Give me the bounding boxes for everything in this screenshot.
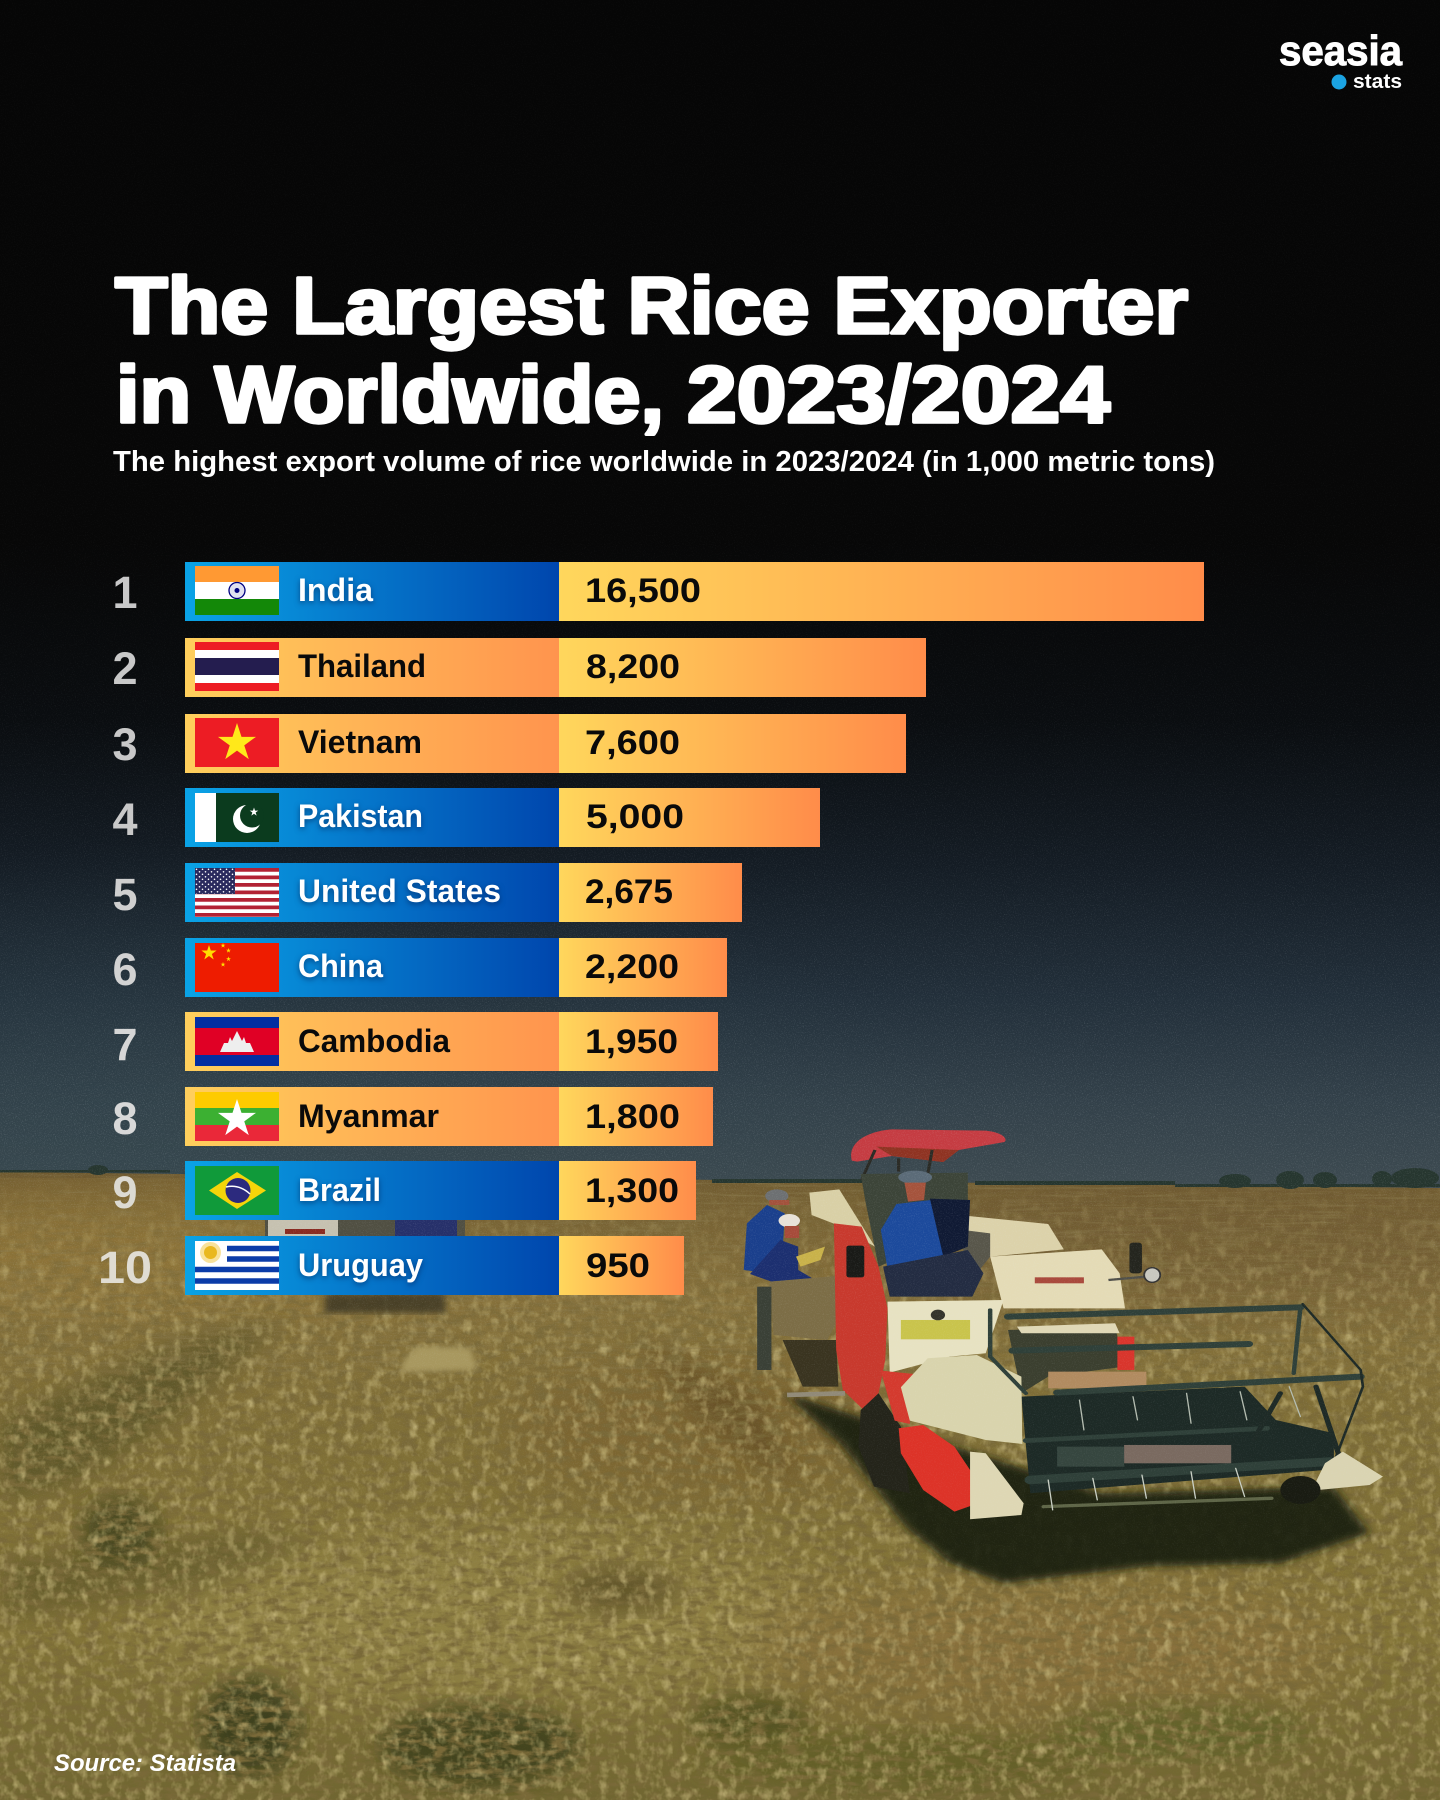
logo bbox=[1279, 27, 1403, 93]
row 9: Brazil bbox=[112, 1161, 696, 1220]
tracks bbox=[858, 1393, 910, 1493]
row 9: Brazil: 9 bbox=[112, 1167, 138, 1218]
workers bbox=[744, 1189, 825, 1282]
side cabinet bbox=[887, 1300, 1004, 1373]
flag: Brazil bbox=[195, 1166, 279, 1215]
logo: stats bbox=[1353, 71, 1402, 93]
row 2: Thailand: 2 bbox=[112, 643, 138, 694]
right wheel bbox=[1280, 1476, 1320, 1504]
row 10: Uruguay: Uruguay bbox=[298, 1247, 423, 1283]
row 8: Myanmar: Myanmar bbox=[298, 1098, 439, 1134]
flag: Vietnam bbox=[195, 718, 279, 767]
title: The Largest Rice Exporter bbox=[115, 261, 1188, 350]
row 4: Pakistan: 4 bbox=[112, 794, 138, 845]
film grain bbox=[0, 663, 1440, 1582]
row 4: Pakistan: 5,000 bbox=[586, 798, 684, 836]
source: Source: Statista bbox=[54, 1750, 236, 1777]
subtitle: The highest export volume of rice worldwide in 2023/2024 (in 1,000 metric tons) bbox=[113, 446, 1215, 478]
row 6: China: 6 bbox=[112, 944, 138, 995]
flag: Uruguay bbox=[195, 1241, 279, 1290]
background: distant tree line bbox=[0, 1165, 1440, 1189]
flag: Myanmar bbox=[195, 1092, 279, 1141]
row 5: United States bbox=[112, 863, 742, 922]
row 9: Brazil: Brazil bbox=[298, 1172, 381, 1208]
logo badge bbox=[1332, 74, 1346, 90]
row 1: India: 16,500 bbox=[585, 572, 701, 610]
row 3: Vietnam: Vietnam bbox=[298, 724, 422, 760]
row 8: Myanmar: 8 bbox=[112, 1093, 138, 1144]
flag: Cambodia bbox=[195, 1017, 279, 1066]
mirrors bbox=[1108, 1243, 1160, 1282]
title: in Worldwide, bbox=[116, 350, 664, 439]
row 6: China bbox=[112, 938, 727, 997]
header interior bbox=[1008, 1323, 1334, 1493]
row 3: Vietnam bbox=[112, 714, 906, 773]
row 1: India: India bbox=[298, 572, 373, 608]
flag: Pakistan bbox=[195, 793, 279, 842]
row 1: India: 1 bbox=[112, 567, 138, 618]
row 10: Uruguay: 950 bbox=[586, 1247, 650, 1285]
row 7: Cambodia bbox=[112, 1012, 718, 1071]
row 9: Brazil: 1,300 bbox=[585, 1172, 679, 1210]
background: rice field bbox=[0, 1170, 1440, 1800]
red lower panel bbox=[881, 1371, 914, 1424]
title bbox=[115, 261, 1188, 439]
row 4: Pakistan bbox=[112, 788, 820, 847]
red wheel guard bbox=[899, 1425, 973, 1512]
row 5: United States: United States bbox=[298, 873, 501, 909]
row 8: Myanmar: 1,800 bbox=[585, 1098, 680, 1136]
grain bag bbox=[769, 1276, 846, 1340]
row 2: Thailand bbox=[112, 638, 926, 697]
flag: China bbox=[195, 943, 279, 992]
row 2: Thailand: Thailand bbox=[298, 648, 426, 684]
row 2: Thailand: 8,200 bbox=[586, 648, 680, 686]
row 10: Uruguay: 10 bbox=[98, 1242, 152, 1293]
cab bbox=[861, 1173, 968, 1267]
background: distant machine behind bars bbox=[265, 1215, 478, 1372]
header reel bars bbox=[990, 1304, 1363, 1510]
logo: seasia bbox=[1279, 27, 1403, 74]
flag: India bbox=[195, 566, 279, 615]
row 7: Cambodia: 7 bbox=[112, 1019, 138, 1070]
row 3: Vietnam: 3 bbox=[112, 719, 138, 770]
row 5: United States: 5 bbox=[112, 869, 138, 920]
flag: Thailand bbox=[195, 642, 279, 691]
row 10: Uruguay bbox=[98, 1236, 684, 1295]
cream corner bbox=[970, 1452, 1024, 1519]
row 6: China: China bbox=[298, 948, 383, 984]
title: 2023/2024 bbox=[687, 350, 1111, 439]
driver bbox=[881, 1171, 983, 1297]
row 8: Myanmar bbox=[112, 1087, 713, 1146]
right divider nose bbox=[1312, 1452, 1383, 1491]
red body bbox=[834, 1223, 887, 1409]
row 3: Vietnam: 7,600 bbox=[585, 724, 680, 762]
row 6: China: 2,200 bbox=[585, 948, 679, 986]
cream side shell bbox=[901, 1355, 1022, 1444]
harvester bbox=[744, 1129, 1383, 1583]
engine housing bbox=[959, 1215, 1125, 1308]
canopy bbox=[851, 1129, 1006, 1180]
rear hopper bbox=[809, 1189, 875, 1247]
row 7: Cambodia: Cambodia bbox=[298, 1023, 450, 1059]
row 1: India bbox=[112, 562, 1204, 621]
row 4: Pakistan: Pakistan bbox=[298, 798, 423, 834]
row 5: United States: 2,675 bbox=[585, 873, 673, 911]
ground shadow bbox=[785, 1393, 1370, 1583]
row 7: Cambodia: 1,950 bbox=[585, 1023, 678, 1061]
flag: United States bbox=[195, 868, 279, 917]
